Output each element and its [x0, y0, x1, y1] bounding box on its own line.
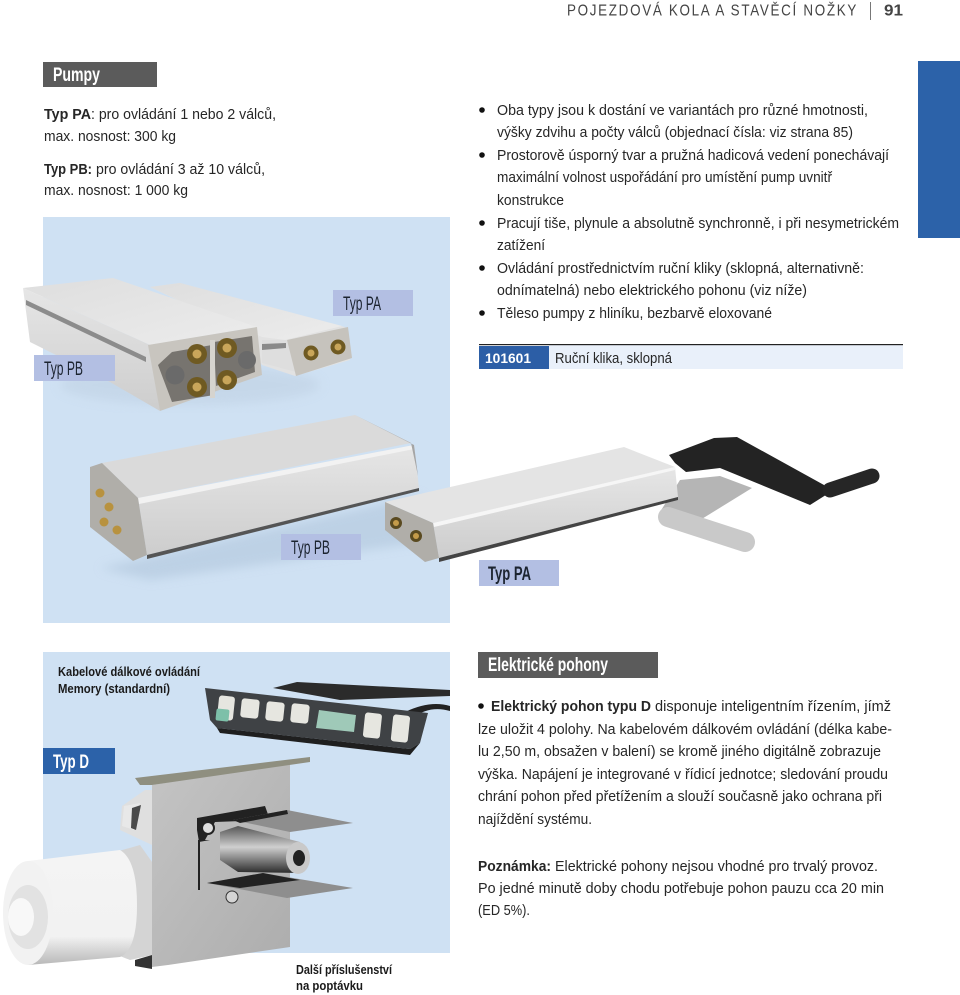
text block: pump types: max. nosnost: 1 000 kg [44, 183, 188, 199]
caption: remote control: Kabelové dálkové ovládání [58, 665, 200, 679]
table row: accessory 101601: Ruční klika, sklopná [555, 351, 673, 367]
heading: Pumpy: Pumpy [53, 65, 100, 86]
text block: drive D description: lze uložit 4 polohy. Na kabelovém dálkovém ovládání (délka kabe- [478, 722, 892, 738]
text block: note: Po jedné minutě doby chodu potřebuje pohon pauzu cca 20 min [478, 881, 884, 897]
bullet list: pump features [479, 103, 899, 322]
label: Typ PA lower: Typ PA [488, 564, 531, 585]
bullet list: pump features: výšky zdvihu a počty válců (objednací čísla: viz strana 85) [497, 125, 853, 141]
bullet list: pump features: Prostorově úsporný tvar a pružná hadicová vedení ponechávají [497, 148, 889, 164]
caption: further accessories [296, 963, 392, 993]
caption: further accessories: na poptávku [296, 979, 363, 993]
text block: pump types: Typ PA [44, 107, 92, 123]
text block: drive D description: výška. Napájení je integrované v řídicí jednotce; sledování proudu [478, 767, 888, 783]
page header: 91 [884, 2, 903, 20]
label: Typ PB lower: Typ PB [291, 538, 330, 559]
panel: blue photo background [43, 217, 450, 623]
label: Typ PB lower [281, 534, 361, 560]
bullet list: pump features: maximální volnost uspořádání pro umístění pump uvnitř [497, 170, 833, 186]
bullet list: pump features: zatížení [497, 238, 545, 254]
caption: further accessories: Další příslušenství [296, 963, 392, 977]
text block: pump types: pro ovládání 3 až 10 válců, [96, 162, 265, 178]
bullet list: pump features: Ovládání prostřednictvím ruční kliky (sklopná, alternativně: [497, 261, 864, 277]
table row: accessory 101601: 101601 [485, 350, 531, 366]
text block: drive D description: Elektrický pohon typu D [491, 699, 651, 715]
text block: note: Elektrické pohony nejsou vhodné pro trvalý provoz. [555, 859, 878, 875]
table row: accessory 101601 [479, 344, 903, 369]
text block: note: (ED 5%). [478, 903, 530, 919]
panel: drive photo background [43, 652, 450, 953]
label: Typ PB upper [34, 355, 115, 381]
text block: drive D description [478, 699, 892, 828]
illustration: pump PA with crank [385, 437, 872, 562]
label: Typ PA upper: Typ PA [343, 294, 381, 315]
text block: drive D description: lu 2,50 m, obsažen v balení) se kromě jiného digitálně zobrazuje [478, 744, 881, 760]
illustration: drive D with motor and bracket [3, 757, 353, 969]
text block: pump types: max. nosnost: 300 kg [44, 129, 176, 145]
text block: drive D description: najíždění systému. [478, 812, 592, 828]
text block: pump types [44, 107, 276, 199]
text block: note: Poznámka: [478, 859, 551, 875]
heading: Pumpy [43, 62, 157, 87]
label: Typ PB upper: Typ PB [44, 359, 83, 380]
caption: remote control: Memory (standardní) [58, 682, 170, 696]
illustration: pump PB and PA from front [23, 278, 352, 411]
label: Typ D [43, 748, 115, 774]
bullet list: pump features: Oba typy jsou k dostání ve variantách pro různé hmotnosti, [497, 103, 868, 119]
label: Typ D: Typ D [53, 752, 89, 773]
caption: remote control [58, 665, 200, 696]
bullet list: pump features: Těleso pumpy z hliníku, bezbarvě eloxované [497, 306, 772, 322]
text block: drive D description: disponuje inteligentním řízením, jímž [655, 699, 891, 715]
illustration: pump PB rear view [90, 415, 440, 580]
heading: Elektrické pohony: Elektrické pohony [488, 655, 608, 676]
text block: drive D description: chrání pohon před přetížením a slouží současně jako ochrana při [478, 789, 882, 805]
bullet list: pump features: odnímatelná) nebo elektrického pohonu (viz níže) [497, 283, 807, 299]
label: Typ PA lower [479, 560, 559, 586]
text block: pump types: Typ PB: [44, 162, 92, 178]
bullet list: pump features: Pracují tiše, plynule a absolutně synchronně, i při nesymetrickém [497, 216, 899, 232]
text block: pump types: : pro ovládání 1 nebo 2 válců, [91, 107, 276, 123]
text block: note [478, 859, 884, 919]
page header: POJEZDOVÁ KOLA A STAVĚCÍ NOŽKY [567, 0, 858, 20]
bullet list: pump features: konstrukce [497, 193, 564, 209]
illustration: cable remote control [205, 682, 450, 755]
label: Typ PA upper [333, 290, 413, 316]
blue side tab [918, 61, 960, 238]
